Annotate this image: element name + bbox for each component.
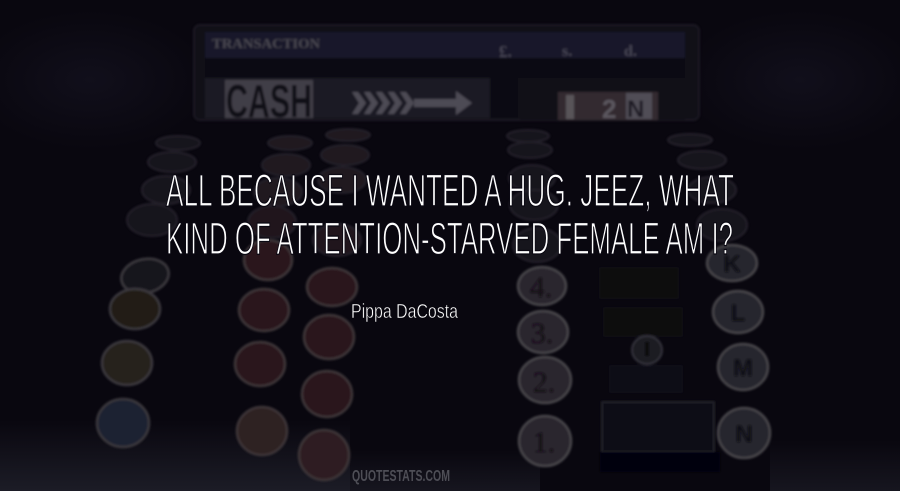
key labels: letters <box>723 251 753 448</box>
display panel: transaction window <box>194 25 699 127</box>
author: Pippa DaCosta <box>351 301 459 323</box>
display panel: transaction window: s. <box>562 43 572 60</box>
amount wheels: 2 <box>602 94 616 124</box>
label: CASH <box>225 75 313 127</box>
currency labels: £. <box>499 42 512 61</box>
key labels: letters: M <box>733 355 753 382</box>
lower keys: red columns <box>235 240 357 480</box>
arrow <box>352 91 472 115</box>
lock plate with key <box>600 268 720 472</box>
key labels: pence <box>530 271 555 459</box>
lower keys: left column <box>97 254 172 447</box>
key labels: letters: K <box>723 251 741 278</box>
lower keys: pence column <box>518 267 571 466</box>
label: TRANSACTION: TRANSACTION <box>212 37 320 52</box>
label: CASH: CASH <box>226 75 312 127</box>
key labels: pence: 4. <box>530 271 552 304</box>
key labels: letters: L <box>731 300 745 327</box>
key labels: pence: 1. <box>533 426 555 459</box>
quote text <box>166 165 734 264</box>
key labels: letters: N <box>735 421 753 448</box>
watermark: QUOTESTATS.COM <box>352 468 450 485</box>
amount wheels <box>558 92 658 124</box>
display panel: transaction window: d. <box>624 43 637 60</box>
key labels: pence: 3. <box>531 317 553 350</box>
amount wheels: N <box>627 96 644 123</box>
key labels: pence: 2. <box>533 366 555 399</box>
upper key stacks, dimmed <box>127 129 747 262</box>
lower keys: letter column <box>707 245 770 458</box>
